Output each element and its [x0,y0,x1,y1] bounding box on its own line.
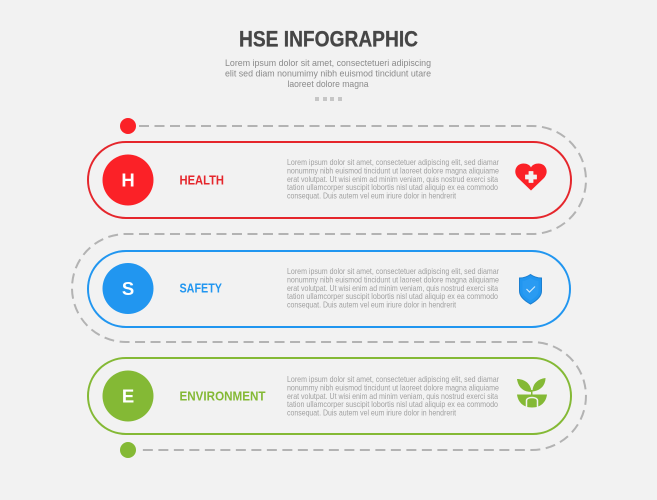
start dot [120,118,136,134]
subtitle text: laoreet dolore magna [288,79,369,89]
safety description: tation ullamcorper suscipit lobortis nisl utad aliquip ex ea commodo [287,292,498,301]
icon: heart with cross [515,164,547,190]
title ornament dots [315,97,342,101]
health description: Lorem ipsum dolor sit amet, consectetuer adipiscing elit, sed diamar [287,158,499,167]
subtitle text: Lorem ipsum dolor sit amet, consectetueri adipiscing [225,58,431,68]
health description: erat volutpat. Ut wisi enim ad minim veniam, quis nostrud exerci sita [287,175,498,184]
icon: plant in bowl [517,378,547,408]
health heading: HEALTH [180,172,224,188]
health description: tation ullamcorper suscipit lobortis nisl utad aliquip ex ea commodo [287,183,498,192]
safety outline [88,251,570,327]
health description: nonummy nibh euismod tincidunt ut laoreet dolore magna aliquiame [287,166,499,176]
environment description: nonummy nibh euismod tincidunt ut laoreet dolore magna aliquiame [287,384,499,392]
environment description: consequat. Duis autem vel eum iriure dolor in hendrerit [287,409,457,418]
subtitle text [225,58,431,89]
panel: environment [88,358,571,434]
safety badge [102,263,154,314]
environment description: erat volutpat. Ut wisi enim ad minim veniam, quis nostrud exerci sita [287,392,498,401]
health badge: H [121,170,135,190]
safety description: consequat. Duis autem vel eum iriure dolor in hendrerit [287,301,457,310]
health badge [102,154,154,206]
health description: consequat. Duis autem vel eum iriure dolor in hendrerit [287,192,457,201]
environment badge [102,370,154,422]
environment description: tation ullamcorper suscipit lobortis nisl utad aliquip ex ea commodo [287,400,498,409]
environment badge: E [122,386,134,407]
health outline [88,142,571,218]
safety description: nonummy nibh euismod tincidunt ut laoreet dolore magna aliquiame [287,276,499,284]
dashed connector path [72,126,586,450]
title: HSE INFOGRAPHIC [239,26,418,52]
safety description: erat volutpat. Ut wisi enim ad minim veniam, quis nostrud exerci sita [287,284,498,293]
safety badge: S [122,278,134,299]
end dot [120,442,136,458]
environment heading: ENVIRONMENT [180,388,266,403]
panel: safety [88,251,570,327]
safety description: Lorem ipsum dolor sit amet, consectetuer adipiscing elit, sed diamar [287,267,499,276]
panel: health [88,142,571,218]
subtitle text: elit sed diam nonumimy nibh euismod tincidunt utare [225,68,431,78]
health description [287,158,499,201]
environment description [287,375,499,418]
safety heading: SAFETY [180,281,222,296]
environment description: Lorem ipsum dolor sit amet, consectetuer adipiscing elit, sed diamar [287,375,499,384]
environment outline [88,358,571,434]
icon: shield with check [520,274,542,304]
safety description [287,267,499,310]
